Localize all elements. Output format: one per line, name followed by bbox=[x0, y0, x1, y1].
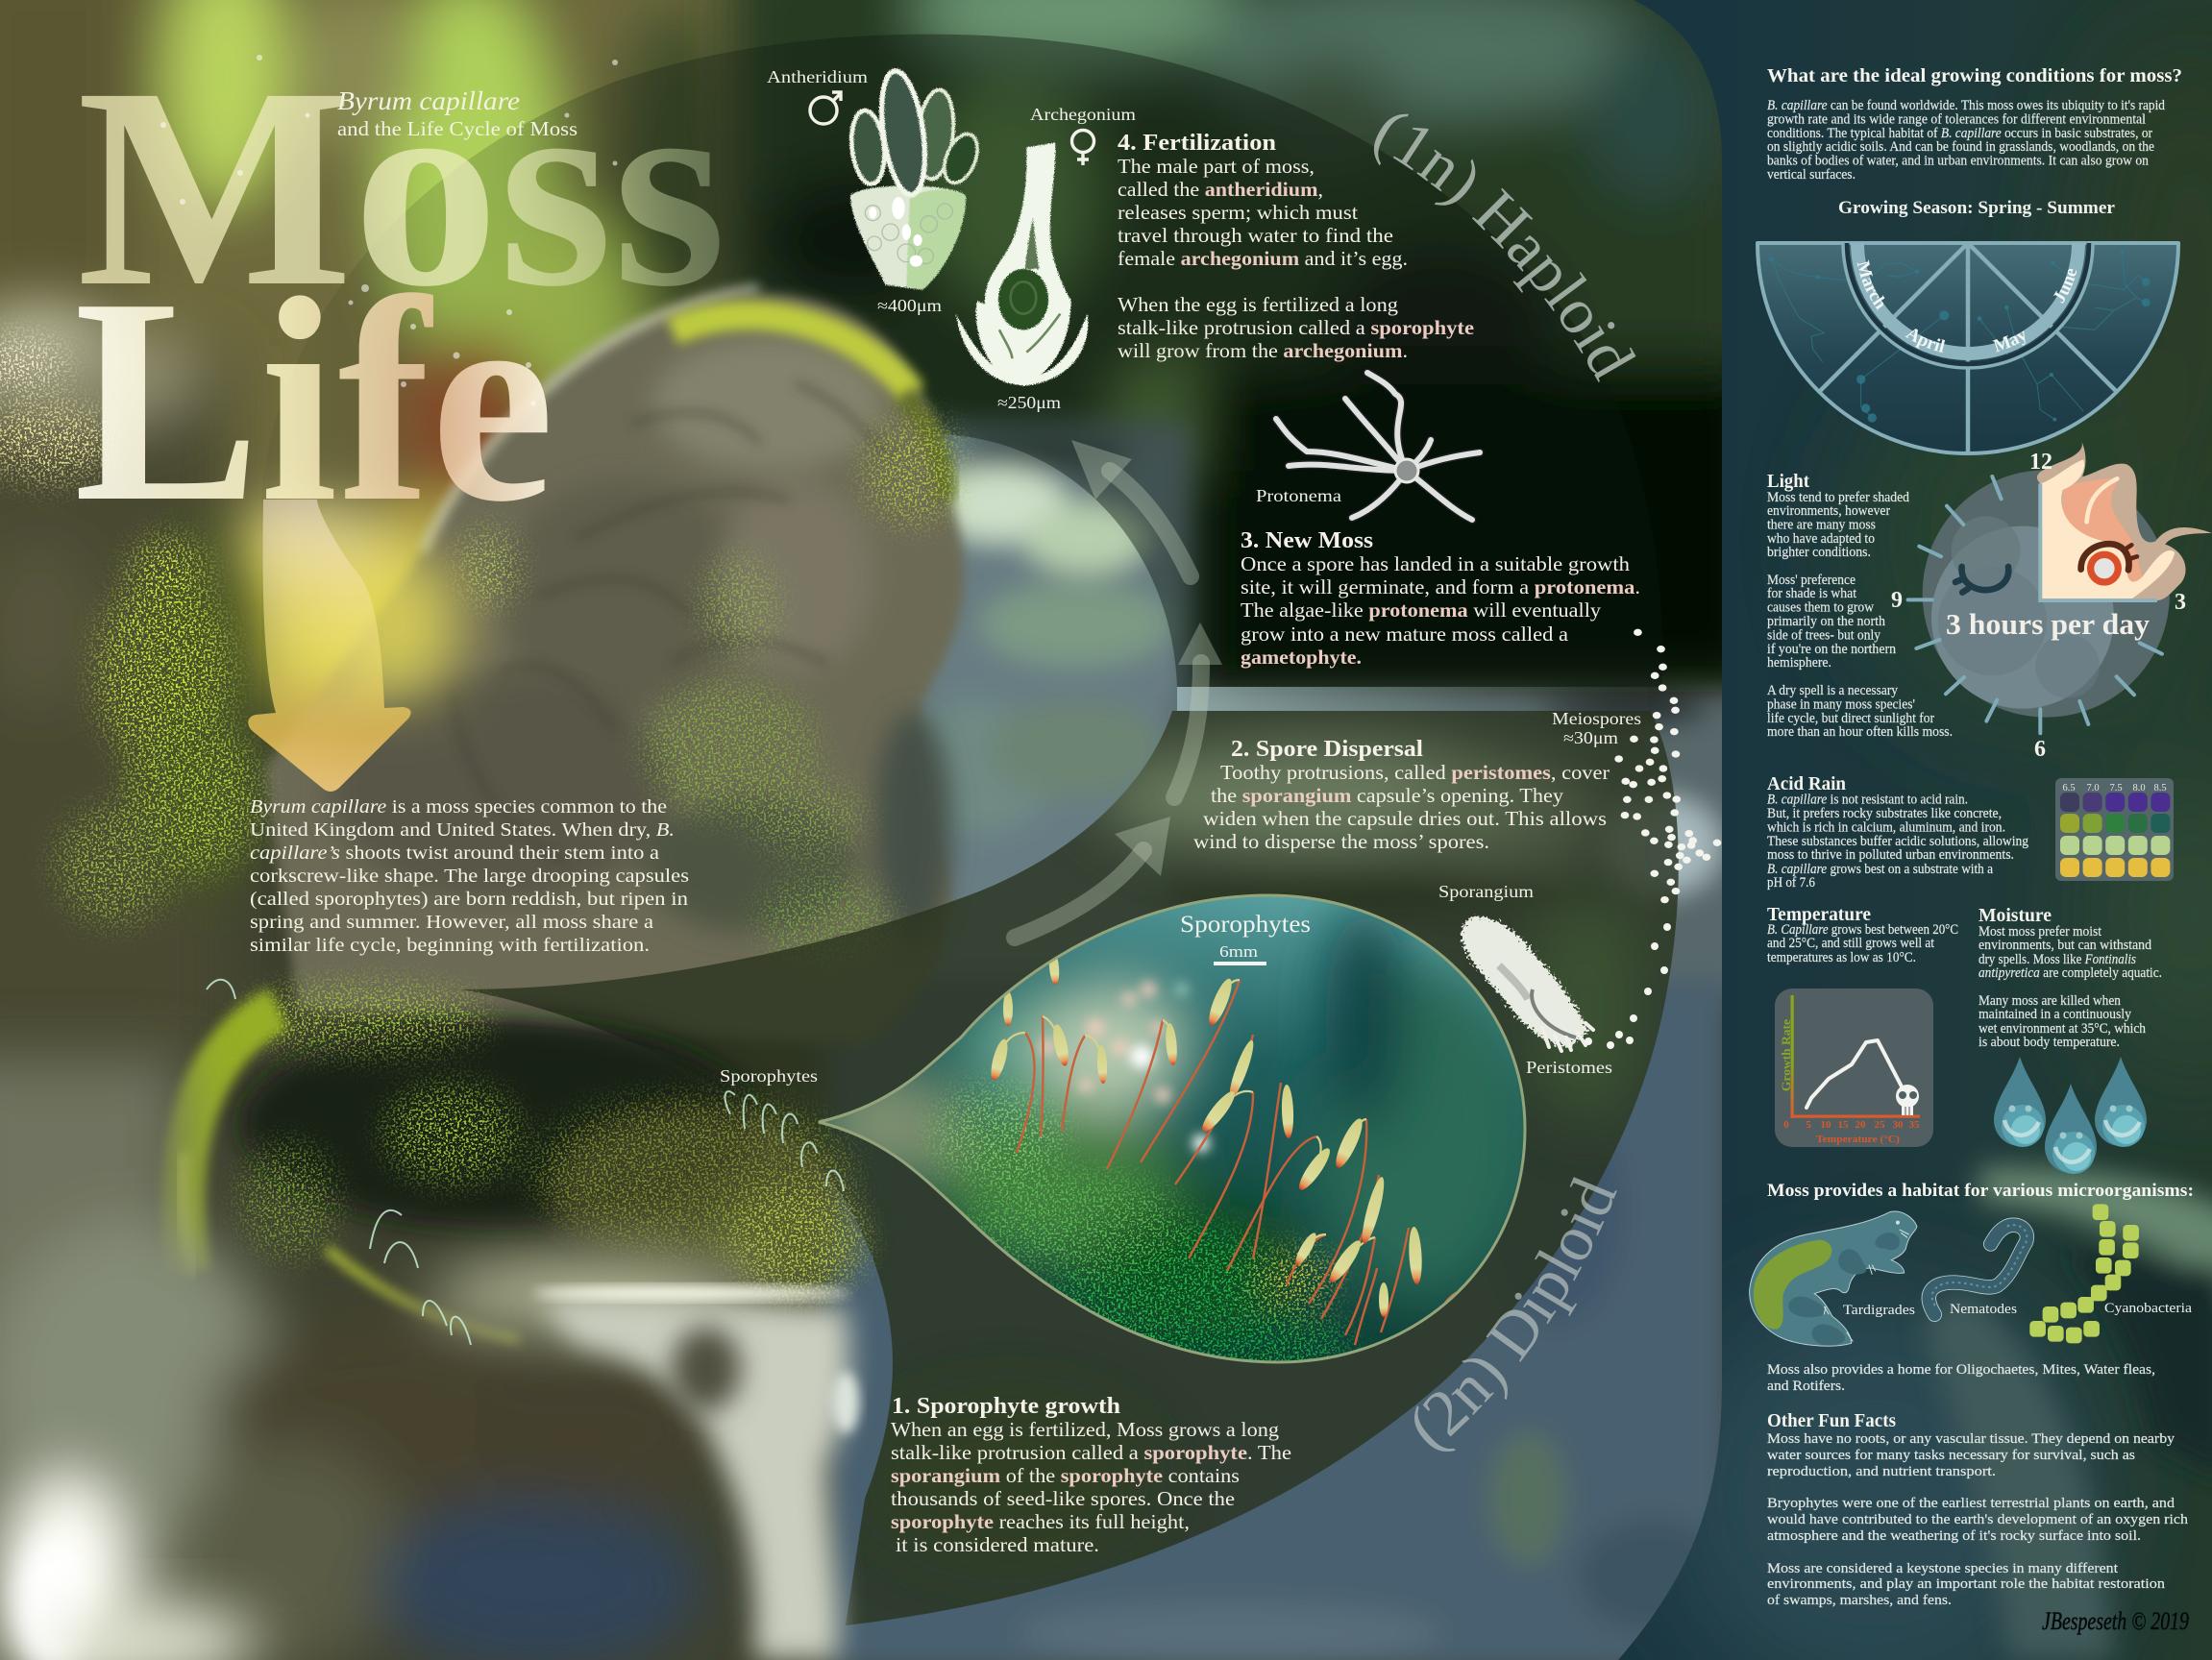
title: Life: Life bbox=[74, 237, 554, 562]
step 3: new moss: site, it will germinate, and form a protonema . bbox=[1241, 575, 1640, 598]
intro text: Byrum capillare is a moss species common to the bbox=[250, 796, 667, 818]
separating band between lobes bbox=[1177, 687, 1648, 711]
intro text: similar life cycle, beginning with fertilization. bbox=[250, 935, 650, 956]
text: acid rain: B. capillare is not resistant to acid rain. bbox=[1767, 793, 1968, 808]
step 1: sporophyte growth bbox=[891, 1394, 1291, 1556]
label: protonema: Protonema bbox=[1256, 486, 1341, 505]
text: temperature: temperatures as low as 10°C. bbox=[1767, 950, 1916, 965]
text: light: for shade is what bbox=[1767, 586, 1856, 601]
curved label: (1n) Haploid: (1n) Haploid bbox=[1374, 113, 1635, 382]
clock caption: 3 hours per day bbox=[1946, 607, 2151, 641]
step 1: sporophyte growth: 1. Sporophyte growth bbox=[892, 1394, 1120, 1419]
text: moisture bbox=[1979, 905, 2162, 1050]
archegonium illustration bbox=[956, 142, 1088, 386]
text: temperature bbox=[1767, 904, 1958, 965]
step 3: new moss: grow into a new mature moss called a bbox=[1241, 622, 1569, 646]
panel: lower diploid lobe bbox=[461, 711, 1679, 1625]
icon: water drops bbox=[1994, 1057, 2147, 1174]
sporophytes bubble bbox=[812, 895, 1528, 1383]
text: moisture: Most moss prefer moist bbox=[1979, 924, 2101, 940]
text: habitat intro: vertical surfaces. bbox=[1767, 167, 1856, 183]
step 3: new moss: gametophyte. bbox=[1241, 646, 1362, 669]
label: cyanobacteria: Cyanobacteria bbox=[2104, 1301, 2193, 1316]
intro text bbox=[250, 796, 689, 956]
text: acid rain: But, it prefers rocky substrates like concrete, bbox=[1767, 806, 2002, 821]
temperature chart: 5 bbox=[1806, 1119, 1811, 1131]
text: other fun facts: Moss are considered a keystone species in many different bbox=[1767, 1561, 2118, 1576]
text: other fun facts: Other Fun Facts bbox=[1767, 1410, 1896, 1431]
text: light: life cycle, but direct sunlight for bbox=[1767, 711, 1934, 726]
heading: microorganisms: Moss provides a habitat for various microorganisms: bbox=[1767, 1181, 2194, 1201]
clock numbers bbox=[1891, 450, 2186, 762]
intro text: spring and summer. However, all moss share a bbox=[250, 912, 653, 933]
arrow descending from title bbox=[248, 500, 411, 792]
step 4: fertilization: travel through water to find the bbox=[1118, 224, 1393, 247]
label: sporophytes on bowl: Sporophytes bbox=[720, 1066, 818, 1086]
scale bar: 6mm: 6mm bbox=[1219, 942, 1258, 961]
text: habitat intro: B. capillare can be found worldwide. This moss owes its ubiquity to it's rapid bbox=[1767, 98, 2166, 113]
step 1: sporophyte growth: stalk-like protrusion called a sporophyte . The bbox=[891, 1441, 1291, 1464]
text: other fun facts: atmosphere and the weathering of it's rocky surface into soil. bbox=[1767, 1528, 2141, 1544]
text: other habitat residents: Moss also provides a home for Oligochaetes, Mites, Water fleas, bbox=[1767, 1362, 2155, 1378]
clock numbers: 3 bbox=[2175, 590, 2186, 615]
temperature chart: 30 bbox=[1893, 1119, 1904, 1131]
cycle arrows bbox=[1015, 440, 1222, 938]
pH chart: 7.5 bbox=[2109, 783, 2123, 793]
step 3: new moss: Once a spore has landed in a suitable growth bbox=[1241, 552, 1631, 575]
subtitle bbox=[337, 86, 578, 140]
text: acid rain: Acid Rain bbox=[1767, 773, 1846, 794]
label: meiospores: Meiospores bbox=[1552, 709, 1641, 728]
antheridium illustration bbox=[848, 68, 984, 290]
text: temperature: Temperature bbox=[1767, 904, 1871, 925]
text: light: primarily on the north bbox=[1767, 614, 1886, 629]
text: moisture: wet environment at 35°C, which bbox=[1979, 1021, 2147, 1037]
text: light: if you're on the northern bbox=[1767, 642, 1897, 657]
step 3: new moss: 3. New Moss bbox=[1241, 528, 1373, 553]
step 2: spore dispersal: 2. Spore Dispersal bbox=[1231, 737, 1423, 762]
temperature chart: 15 bbox=[1837, 1119, 1849, 1131]
icon: female symbol bbox=[1072, 131, 1094, 165]
step 2: spore dispersal: wind to disperse the moss’ spores. bbox=[1193, 830, 1489, 853]
mossy bowl foreground bbox=[181, 984, 865, 1340]
step 1: sporophyte growth: sporangium of the sporophyte contains bbox=[891, 1464, 1240, 1487]
step 1: sporophyte growth: it is considered mature. bbox=[896, 1533, 1099, 1556]
temperature chart: 25 bbox=[1874, 1119, 1885, 1131]
left dark foliage bbox=[0, 305, 274, 1066]
text: light: more than an hour often kills moss. bbox=[1767, 724, 1953, 740]
text: acid rain: which is rich in calcium, aluminum, and iron. bbox=[1767, 820, 2005, 836]
text: light: Light bbox=[1767, 471, 1809, 492]
label: sporangium: Sporangium bbox=[1438, 882, 1534, 901]
clock ticks bbox=[1908, 476, 2162, 733]
icon: sun flames bbox=[2037, 442, 2212, 600]
label: meiospores bbox=[1552, 709, 1641, 747]
label: sporophytes: Sporophytes bbox=[1180, 912, 1311, 938]
text: acid rain: B. capillare grows best on a substrate with a bbox=[1767, 862, 1994, 877]
upper right dark blur bbox=[730, 0, 1768, 692]
text: temperature: and 25°C, and still grows well at bbox=[1767, 936, 1934, 951]
icon: cyanobacteria bbox=[2029, 1204, 2139, 1343]
text: other habitat residents: and Rotifers. bbox=[1767, 1379, 1845, 1394]
label: nematodes: Nematodes bbox=[1950, 1302, 2017, 1317]
text: light: there are many moss bbox=[1767, 517, 1876, 532]
panel: growing conditions bbox=[1618, 0, 2212, 1660]
step 2: spore dispersal: widen when the capsule dries out. This allows bbox=[1203, 807, 1607, 830]
icon: male symbol bbox=[810, 92, 841, 124]
spore trail bbox=[1585, 629, 1721, 1049]
icon: sleeping eye bbox=[1955, 567, 2008, 593]
step 1: sporophyte growth: sporophyte reaches its full height, bbox=[891, 1510, 1190, 1533]
lower left fog and waterfall bbox=[0, 1057, 859, 1660]
text: other fun facts: would have contributed to the earth's development of an oxygen rich bbox=[1767, 1512, 2189, 1527]
mid rock bbox=[846, 423, 1749, 1001]
step 2: spore dispersal: the sporangium capsule’s opening. They bbox=[1211, 784, 1564, 807]
text: light: causes them to grow bbox=[1767, 600, 1874, 616]
text: moisture: is about body temperature. bbox=[1979, 1035, 2120, 1050]
subtitle: and the Life Cycle of Moss bbox=[337, 117, 578, 140]
step 4: fertilization: called the antheridium , bbox=[1118, 178, 1323, 201]
subtitle: Byrum capillare bbox=[337, 86, 520, 115]
scale bar: 6mm bbox=[1214, 942, 1266, 965]
text: other fun facts: water sources for many tasks necessary for survival, such as bbox=[1767, 1448, 2135, 1463]
pH chart bbox=[2055, 778, 2174, 881]
text: light: hemisphere. bbox=[1767, 655, 1831, 671]
label: 250 micrometres: ≈250μm bbox=[997, 393, 1061, 412]
step 3: new moss: The algae-like protonema will eventually bbox=[1241, 598, 1602, 622]
text: moisture: maintained in a continuously bbox=[1979, 1007, 2132, 1022]
growing season chart: June bbox=[2053, 269, 2077, 304]
light clock dial bbox=[1908, 442, 2212, 733]
label: tardigrades: Tardigrades bbox=[1843, 1303, 1915, 1318]
step 4: fertilization: The male part of moss, bbox=[1118, 155, 1315, 178]
clock numbers: 6 bbox=[2034, 737, 2046, 762]
small sporophytes on bowl bbox=[207, 980, 844, 1345]
text: light: phase in many moss species' bbox=[1767, 697, 1915, 713]
protonema illustration bbox=[1276, 373, 1480, 520]
text: moisture: antipyretica are completely aquatic. bbox=[1979, 965, 2162, 981]
text: moisture: dry spells. Moss like Fontinalis bbox=[1979, 952, 2136, 967]
intro text: corkscrew-like shape. The large drooping capsules bbox=[250, 866, 689, 887]
intro text: United Kingdom and United States. When dry, B. bbox=[250, 819, 675, 841]
curved label: (2n) Diploid: (2n) Diploid bbox=[1414, 1177, 1617, 1452]
constellations bbox=[1771, 252, 2146, 420]
text: acid rain bbox=[1767, 773, 2028, 891]
temperature chart: 0 bbox=[1783, 1119, 1789, 1131]
top left olive backdrop bbox=[0, 0, 769, 701]
label: archegonium: Archegonium bbox=[1030, 105, 1136, 124]
text: habitat intro: conditions. The typical habitat of B. capillare occurs in basic substrates, or bbox=[1767, 126, 2152, 141]
pH chart: 6.5 bbox=[2062, 783, 2076, 793]
heading: growing season: Growing Season: Spring - Summer bbox=[1838, 198, 2116, 218]
step 1: sporophyte growth: thousands of seed-like spores. Once the bbox=[891, 1487, 1235, 1510]
month labels: March bbox=[1856, 259, 1885, 310]
text: light: Moss tend to prefer shaded bbox=[1767, 490, 1910, 505]
label: 400 micrometres: ≈400μm bbox=[877, 296, 942, 315]
clock numbers: 9 bbox=[1891, 588, 1903, 613]
temperature chart: Growth Rate bbox=[1779, 1019, 1793, 1091]
text: other fun facts bbox=[1767, 1410, 2189, 1608]
lower right blue rock bbox=[826, 980, 1730, 1660]
text: light bbox=[1767, 471, 1953, 740]
text: other habitat residents bbox=[1767, 1362, 2155, 1394]
text: moisture: environments, but can withstand bbox=[1979, 938, 2152, 953]
step 4: fertilization bbox=[1118, 131, 1474, 362]
growing season chart: April bbox=[1905, 329, 1945, 354]
text: other fun facts: Moss have no roots, or any vascular tissue. They depend on nearby bbox=[1767, 1431, 2175, 1447]
text: other fun facts: environments, and play an important role the habitat restoration bbox=[1767, 1576, 2166, 1592]
stone face bbox=[264, 288, 964, 1047]
icon: open eye bbox=[2081, 544, 2137, 582]
pH chart: 7.0 bbox=[2086, 783, 2100, 793]
arrow glow bbox=[250, 500, 461, 701]
text: habitat intro: on slightly acidic soils. And can be found in grasslands, woodlands, on the bbox=[1767, 139, 2154, 155]
icon: skull bbox=[1896, 1085, 1919, 1115]
label: meiospores: ≈30μm bbox=[1563, 728, 1618, 747]
text: habitat intro bbox=[1767, 98, 2166, 183]
text: other fun facts: Bryophytes were one of the earliest terrestrial plants on earth, and bbox=[1767, 1496, 2175, 1511]
text: habitat intro: growth rate and its wide range of tolerances for different environmental bbox=[1767, 111, 2146, 127]
text: moisture: Moisture bbox=[1979, 905, 2052, 926]
moss patches on statue bbox=[0, 340, 961, 970]
temperature chart: Temperature (°C) bbox=[1816, 1134, 1900, 1145]
text: other fun facts: reproduction, and nutrient transport. bbox=[1767, 1464, 1996, 1479]
text: light: side of trees- but only bbox=[1767, 628, 1881, 644]
step 1: sporophyte growth: When an egg is fertilized, Moss grows a long bbox=[891, 1418, 1280, 1441]
temperature chart: 20 bbox=[1855, 1119, 1866, 1131]
step 4: fertilization: stalk-like protrusion called a sporophyte bbox=[1118, 316, 1474, 339]
step 4: fertilization: 4. Fertilization bbox=[1118, 131, 1276, 156]
text: light: environments, however bbox=[1767, 503, 1890, 519]
growing season chart: May bbox=[1993, 330, 2026, 352]
label: peristomes: Peristomes bbox=[1526, 1058, 1612, 1077]
clock numbers: 12 bbox=[2029, 450, 2052, 475]
text: light: brighter conditions. bbox=[1767, 545, 1871, 560]
translucent rock glimpsed through lower lobe bbox=[865, 740, 1643, 1566]
heading: growing conditions: What are the ideal growing conditions for moss? bbox=[1767, 66, 2182, 86]
step 4: fertilization: releases sperm; which must bbox=[1118, 201, 1358, 224]
intro text: capillare’s shoots twist around their stem into a bbox=[250, 842, 659, 864]
text: acid rain: These substances buffer acidic solutions, allowing bbox=[1767, 834, 2028, 849]
step 2: spore dispersal: Toothy protrusions, called peristomes , cover bbox=[1220, 761, 1610, 784]
text: temperature: B. Capillare grows best between 20°C bbox=[1767, 922, 1958, 938]
text: acid rain: pH of 7.6 bbox=[1767, 875, 1815, 891]
intro text: (called sporophytes) are born reddish, but ripen in bbox=[250, 889, 688, 910]
step 3: new moss bbox=[1241, 528, 1640, 669]
step 4: fertilization: will grow from the archegonium . bbox=[1118, 339, 1408, 362]
icon: nematode bbox=[1929, 1225, 2027, 1314]
text: moisture: Many moss are killed when bbox=[1979, 993, 2122, 1009]
growing season chart bbox=[1756, 241, 2180, 455]
text: light: who have adapted to bbox=[1767, 531, 1875, 547]
floating spore sparkles bbox=[160, 55, 618, 405]
text: light: Moss' preference bbox=[1767, 573, 1856, 588]
text: acid rain: moss to thrive in polluted urban environments. bbox=[1767, 847, 2014, 863]
sporangium illustration bbox=[1462, 917, 1593, 1051]
panel: upper haploid lobe bbox=[261, 35, 1663, 999]
text: light: A dry spell is a necessary bbox=[1767, 683, 1899, 698]
pH chart: 8.5 bbox=[2153, 783, 2167, 793]
step 2: spore dispersal bbox=[1193, 737, 1610, 853]
temperature chart: 10 bbox=[1820, 1119, 1831, 1131]
pH chart: 8.0 bbox=[2132, 783, 2146, 793]
step 4: fertilization: When the egg is fertilized a long bbox=[1118, 293, 1399, 316]
step 4: fertilization: female archegonium and it’s egg. bbox=[1118, 247, 1408, 270]
temperature chart bbox=[1775, 989, 1933, 1147]
text: other fun facts: of swamps, marshes, and fens. bbox=[1767, 1593, 1952, 1608]
icon: tardigrade bbox=[1750, 1211, 1917, 1346]
temperature chart: 35 bbox=[1908, 1119, 1920, 1131]
label: antheridium: Antheridium bbox=[767, 67, 868, 86]
title: Moss: Moss bbox=[77, 29, 726, 346]
text: habitat intro: banks of bodies of water, and in urban environments. It can also grow on bbox=[1767, 154, 2150, 169]
